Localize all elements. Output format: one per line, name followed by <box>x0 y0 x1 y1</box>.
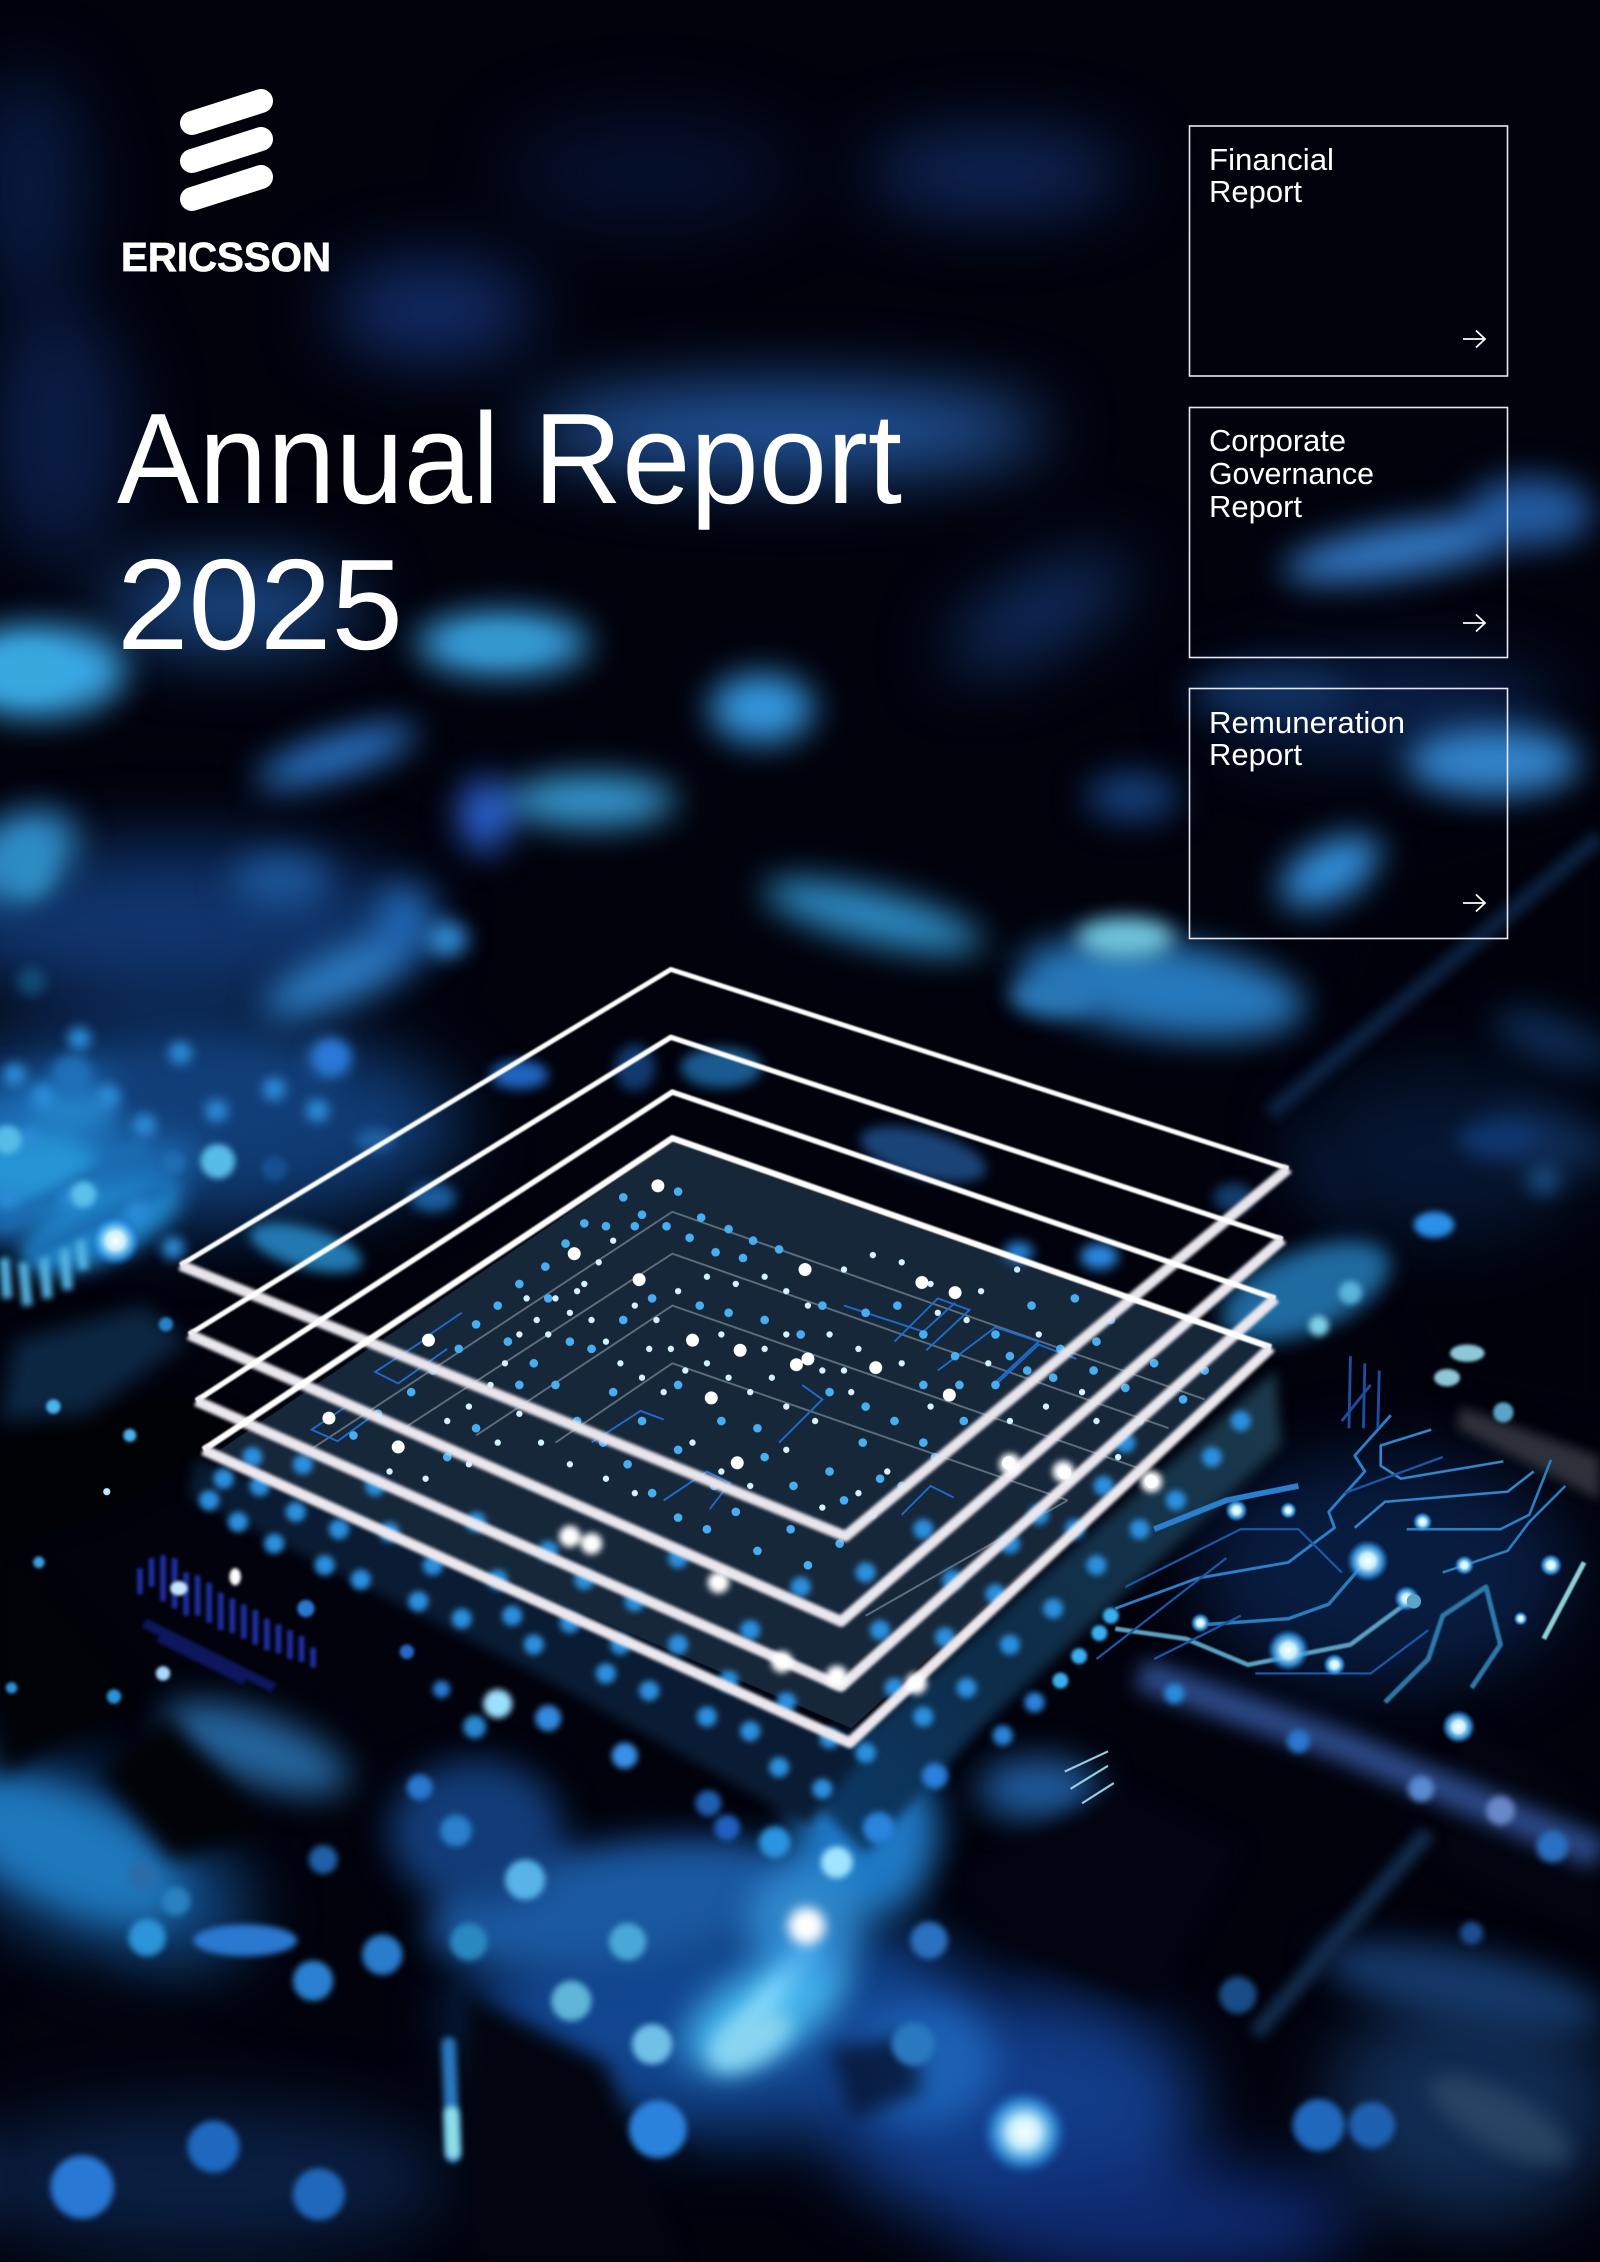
chip nested trace lines <box>310 1212 1205 1616</box>
chip blue micro traces <box>312 1298 1076 1515</box>
circuit glowing nodes <box>1060 1212 1562 1744</box>
layered frames: back to front <box>180 969 1288 1743</box>
wordmark: ERICSSON <box>121 234 331 280</box>
icon: three Ericsson bars <box>192 101 261 199</box>
title: 2025 <box>117 533 403 677</box>
chip bokeh dots on front edge <box>209 1421 1241 1789</box>
title <box>117 387 902 677</box>
lower right diagonal strip <box>1140 1673 1600 1854</box>
arrow <box>1463 894 1485 912</box>
title: Annual Report <box>117 387 902 531</box>
panel: Financial Report link: Financial <box>1209 142 1334 177</box>
purple pin grid <box>140 1555 313 1688</box>
panel: Remuneration Report link <box>1190 688 1508 938</box>
small circuit at chip foot <box>1065 1751 1114 1803</box>
bright bokeh with white core <box>981 2089 1068 2175</box>
chip dots (white large) <box>329 1186 1151 1482</box>
panel: Remuneration Report link: Report <box>1209 737 1302 772</box>
behind-frame glows above chip <box>245 1044 1254 1282</box>
left board bright nodes <box>0 967 414 1704</box>
frame 1 <box>180 969 1288 1536</box>
bright light source near the bottom of the chip <box>699 1868 863 2084</box>
light streak bottom <box>449 2044 453 2155</box>
frame 3 <box>196 1092 1275 1686</box>
logo: Ericsson <box>121 101 331 280</box>
frame 4 <box>203 1138 1271 1743</box>
arrow <box>1463 330 1485 348</box>
panel: Corporate Governance Report link: Report <box>1209 489 1302 524</box>
chip dots (blue) <box>353 1192 1205 1565</box>
upper right diagonal strut <box>1270 837 1600 1114</box>
panel: Remuneration Report link: Remuneration <box>1209 705 1405 740</box>
frame 2 <box>189 1037 1283 1621</box>
right mid chip tile <box>1208 1220 1404 1362</box>
panel: Financial Report link <box>1190 126 1508 376</box>
near bokeh shapes and dark board cut-outs <box>0 629 1600 2262</box>
dark lower diagonal strut <box>1255 1832 1428 2034</box>
circuit traces right <box>1096 1356 1584 1702</box>
mid blurred board shapes <box>0 478 1600 2124</box>
bright hot spots on frames <box>570 1464 1151 1684</box>
left board with stripes and soft pads <box>0 1039 317 1306</box>
chip dots (white small) <box>390 1241 1118 1508</box>
chip side faces <box>189 1370 1281 1854</box>
panel: Financial Report link: Report <box>1209 174 1302 209</box>
right tan plate <box>1457 1407 1600 1500</box>
panel: Corporate Governance Report link <box>1190 408 1508 658</box>
panel: Corporate Governance Report link: Governance <box>1209 456 1374 491</box>
textured grey-blue board bottom right <box>1417 2058 1584 2183</box>
lower bokeh lights <box>50 1681 1568 2220</box>
arrow <box>1463 614 1485 632</box>
chip top surface <box>214 1143 1267 1728</box>
panel: Corporate Governance Report link: Corporate <box>1209 423 1346 458</box>
